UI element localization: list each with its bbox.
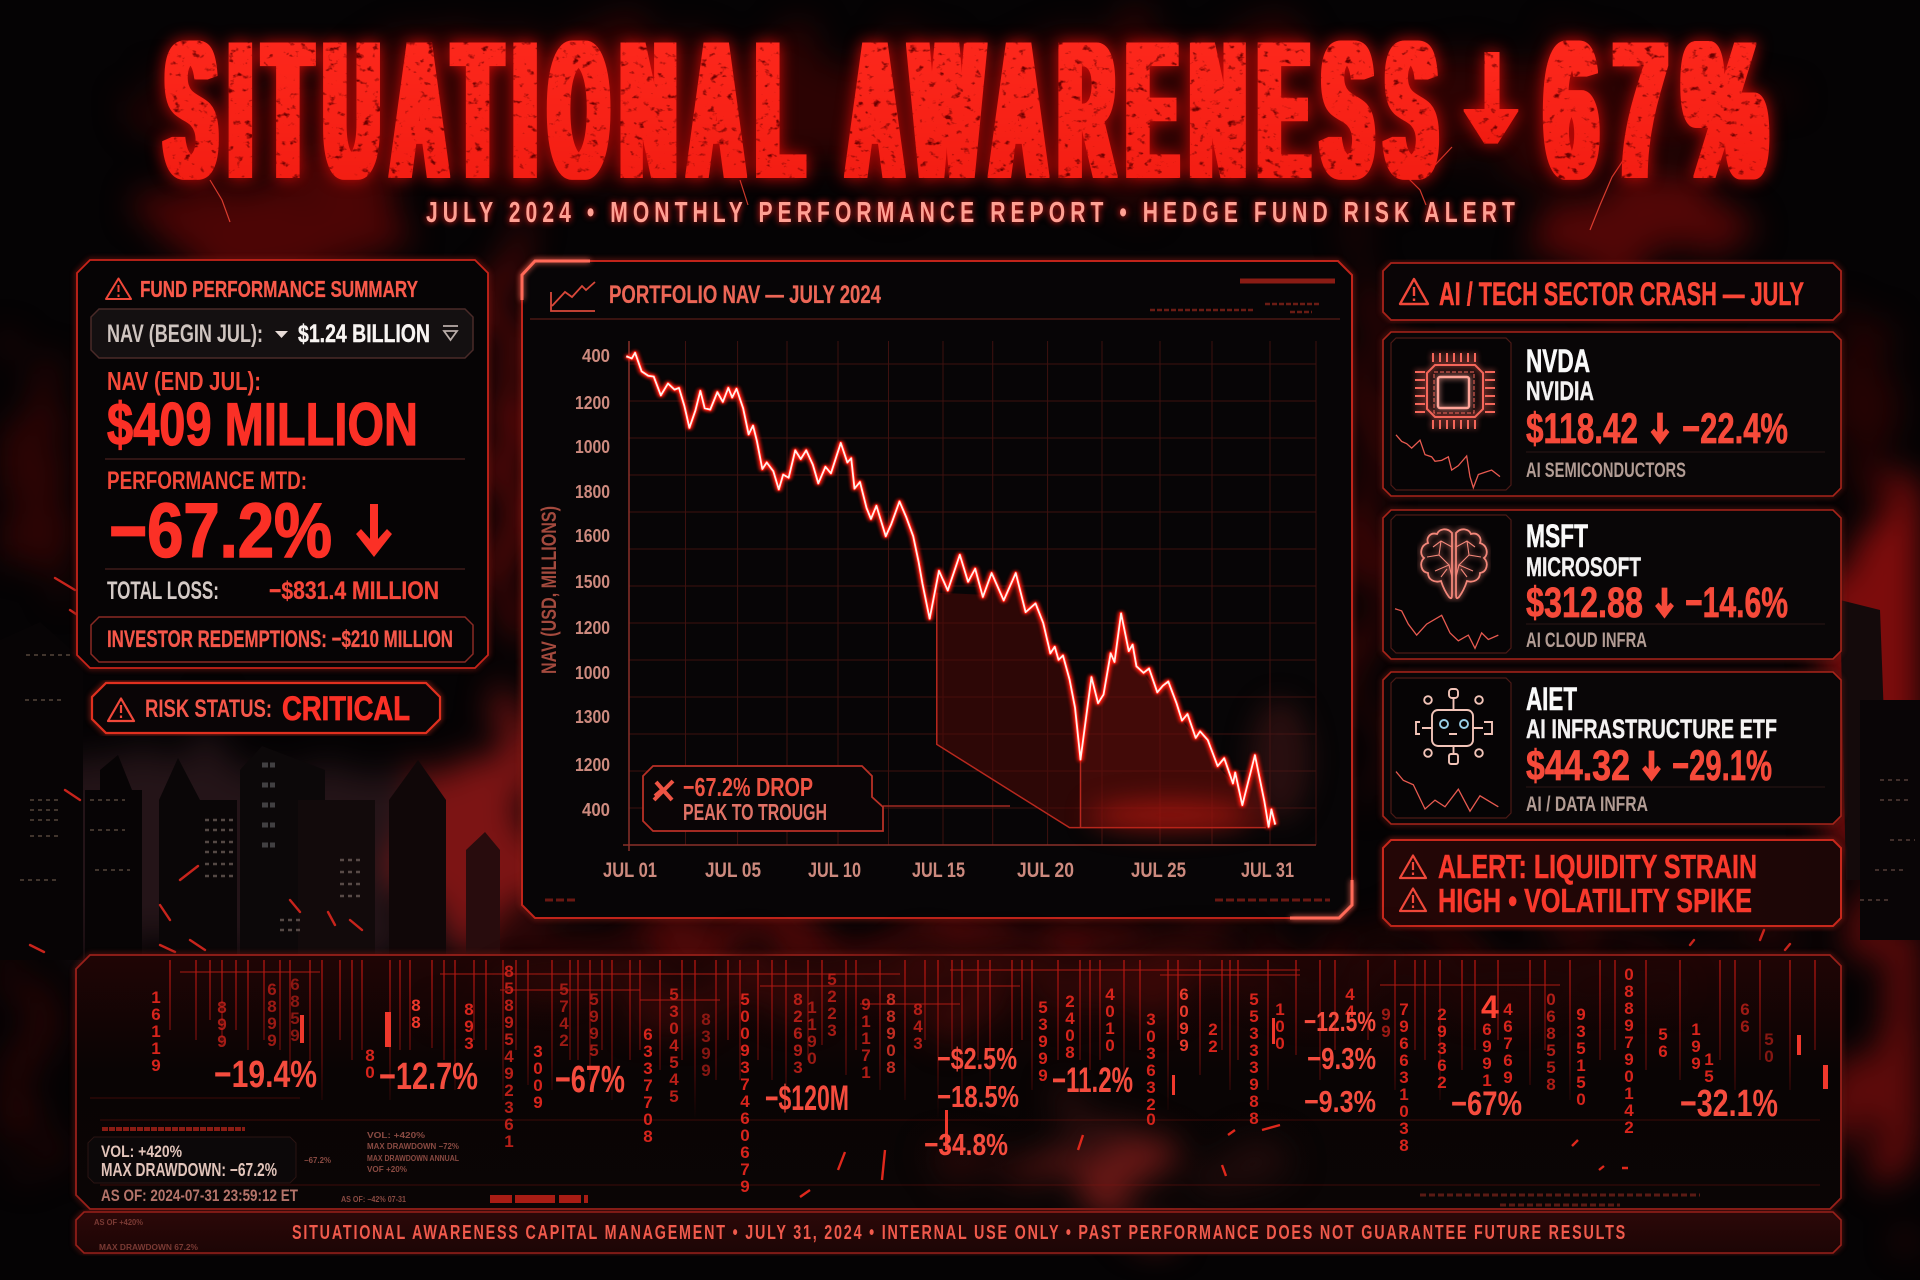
icon: drop cross <box>654 781 673 800</box>
skyline buildings <box>0 600 1920 960</box>
large rain digit: 4 <box>1481 989 1499 1025</box>
floating percentage values: −67% <box>1451 1085 1522 1123</box>
subtitle: JULY 2024 • MONTHLY PERFORMANCE REPORT • HEDGE FUND RISK ALERT <box>426 197 1520 229</box>
data rain digits: 88 <box>406 996 426 1030</box>
data rain digits: 2408 <box>1060 992 1080 1060</box>
data rain digits: 6337708 <box>638 1025 658 1144</box>
building windows <box>20 655 1915 930</box>
data rain digits: 88908 <box>882 990 900 1075</box>
data rain digits: 53999 <box>1034 998 1052 1083</box>
callout: peak to trough: PEAK TO TROUGH <box>683 799 827 825</box>
floating percentage values: −9.3% <box>1304 1084 1376 1119</box>
mini chart <box>1396 435 1500 488</box>
price change: −29.1% <box>1672 742 1772 790</box>
data rain digits: 16119 <box>146 988 166 1073</box>
data rain digits: 796631038 <box>1394 1000 1414 1153</box>
data rain digits: 500937460679 <box>736 990 754 1194</box>
data rain digits: 0 <box>1142 1110 1160 1127</box>
hot glow under line and smoke near chart end <box>1090 700 1310 829</box>
metric: NAV end: $409 MILLION <box>107 391 418 458</box>
mini chart <box>1395 609 1498 648</box>
y axis tick labels: 1500 <box>575 572 610 592</box>
floating percentage values: −32.1% <box>1680 1083 1778 1125</box>
floating percentage values: −$120M <box>765 1079 849 1118</box>
data rain digits: 068558 <box>1542 990 1560 1092</box>
floating percentage values: −12.7% <box>379 1056 478 1098</box>
x axis tick labels: JUL 31 <box>1241 859 1294 882</box>
y axis tick labels: 1200 <box>575 393 610 413</box>
data rain digits: 6859 <box>286 975 304 1043</box>
y axis tick labels: 400 <box>582 346 610 366</box>
panel: data rain band <box>76 955 1841 1209</box>
x axis tick labels: JUL 20 <box>1017 859 1074 882</box>
x axis tick labels <box>603 859 1294 882</box>
small HUD text <box>304 1131 459 1204</box>
metric: NAV end: NAV (END JUL): <box>107 366 261 396</box>
alert line 2: HIGH • VOLATILITY SPIKE <box>1438 882 1752 919</box>
card: NVDA <box>1383 332 1841 496</box>
small HUD text: VOL: +420% <box>367 1131 425 1140</box>
panel: AI tech sector heading <box>1383 263 1841 320</box>
chart axes <box>623 341 1316 851</box>
vertical data streaks <box>170 960 1815 1120</box>
data rain digits: 4010 <box>1100 985 1120 1053</box>
metric: total loss: TOTAL LOSS: <box>107 577 219 605</box>
data rain digits: 85895492361 <box>500 962 518 1149</box>
header HUD detail <box>1150 281 1335 312</box>
price change: $44.32 <box>1526 742 1630 790</box>
data rain digits: 99 <box>1376 1005 1396 1039</box>
ticker: MSFT <box>1526 518 1588 554</box>
small footer HUD: AS OF +420% <box>94 1218 143 1227</box>
metric: total loss <box>107 577 439 605</box>
price change: −14.6% <box>1685 579 1788 627</box>
data rain digits: 8399 <box>696 1010 716 1078</box>
metric: performance MTD: PERFORMANCE MTD: <box>107 467 307 495</box>
alert line 1: ALERT: LIQUIDITY STRAIN <box>1438 848 1757 885</box>
y axis tick labels: 1800 <box>575 482 610 502</box>
bright rain accents <box>300 1012 1828 1150</box>
metric: performance MTD: −67.2% <box>109 488 332 574</box>
HUD readout: VOL: +420% <box>101 1142 182 1161</box>
ticker: AIET <box>1526 681 1577 717</box>
embers <box>30 578 1790 952</box>
card: AIET <box>1383 672 1841 824</box>
data rain digits: 91171 <box>856 995 876 1080</box>
data rain digits: 100 <box>1270 1000 1290 1051</box>
small HUD text: MAX DRAWDOWN ANNUAL <box>367 1154 459 1163</box>
glow and smoke inside band <box>460 967 1680 1199</box>
panel: liquidity alert <box>1383 840 1841 926</box>
embers in band <box>800 1125 1628 1197</box>
icon: chip <box>1415 353 1495 429</box>
drawdown shaded area <box>937 573 1266 828</box>
floating percentage values: −34.8% <box>924 1127 1008 1162</box>
floating percentage values: −12.5% <box>1304 1006 1376 1037</box>
risk value: CRITICAL <box>282 690 410 728</box>
panel heading: FUND PERFORMANCE SUMMARY <box>140 276 418 302</box>
metric: NAV begin: NAV (BEGIN JUL): <box>107 320 263 348</box>
company: MICROSOFT <box>1526 552 1641 582</box>
icon: title down arrow <box>1470 53 1512 143</box>
metric: investor redemptions <box>91 617 473 662</box>
metric: total loss: −$831.4 MILLION <box>269 577 439 605</box>
card: MSFT <box>1383 510 1841 659</box>
floating percentage values <box>214 1006 1778 1162</box>
price change <box>1526 579 1788 627</box>
price change <box>1526 405 1788 453</box>
price change: $312.88 <box>1526 579 1643 627</box>
small footer HUD <box>94 1218 198 1252</box>
callout: peak to trough <box>643 766 1010 831</box>
y axis tick labels: 1000 <box>575 663 610 683</box>
lightning cracks <box>210 137 1648 230</box>
metric: NAV end <box>107 366 418 458</box>
metric: NAV begin: $1.24 BILLION <box>298 320 430 348</box>
chart grid <box>629 341 1316 845</box>
ticker: NVDA <box>1526 343 1590 379</box>
floating percentage values: −19.4% <box>214 1054 317 1096</box>
company: NVIDIA <box>1526 376 1594 406</box>
y axis tick labels: 1600 <box>575 526 610 546</box>
floating percentage values: −9.3% <box>1307 1041 1376 1076</box>
floating percentage values: −18.5% <box>937 1079 1019 1114</box>
data rain digits: 50 <box>1760 1030 1778 1064</box>
data rain digits: 935150 <box>1572 1005 1590 1107</box>
x axis tick labels: JUL 01 <box>603 859 657 882</box>
HUD readout: MAX DRAWDOWN: −67.2% <box>101 1160 277 1180</box>
floating percentage values: −$2.5% <box>937 1041 1017 1076</box>
metric: NAV begin <box>91 309 473 358</box>
x axis tick labels: JUL 25 <box>1131 859 1186 882</box>
data rain digits: 6991 <box>1478 1020 1496 1088</box>
sector tag: AI / DATA INFRA <box>1526 793 1648 816</box>
price change <box>1526 742 1772 790</box>
y axis tick labels: 1200 <box>575 618 610 638</box>
data rain digits: 3009 <box>528 1042 548 1110</box>
chart heading: PORTFOLIO NAV — JULY 2024 <box>609 281 881 309</box>
data rain digits: 0889790142 <box>1620 965 1638 1135</box>
floating percentage values: −67% <box>555 1059 625 1101</box>
y axis tick labels: 1300 <box>575 707 610 727</box>
data rain digits: 5304545 <box>664 985 684 1104</box>
small footer HUD: MAX DRAWDOWN 67.2% <box>99 1243 198 1252</box>
data rain digits: 55333988 <box>1244 990 1264 1126</box>
corner detail <box>545 898 1330 902</box>
sector tag: AI CLOUD INFRA <box>1526 629 1647 652</box>
icon: robot <box>1416 689 1492 764</box>
icon: warning <box>1400 856 1426 878</box>
icon: warning <box>1400 279 1428 304</box>
y axis tick labels <box>575 346 610 820</box>
price change: −22.4% <box>1682 405 1788 453</box>
icon: chart trend <box>551 282 595 311</box>
data rain digits: 5995 <box>584 990 604 1058</box>
data rain digits: 29362 <box>1432 1005 1452 1090</box>
mini chart <box>1396 772 1498 811</box>
floating percentage values: −11.2% <box>1052 1061 1133 1100</box>
y axis tick labels: 1000 <box>575 437 610 457</box>
data rain digits: 80 <box>360 1046 380 1080</box>
data rain digits: 6899 <box>262 980 282 1048</box>
data rain digits: 15 <box>1700 1050 1718 1084</box>
panel: portfolio NAV chart <box>522 261 1352 918</box>
data rain digits: 44 <box>1340 985 1360 1019</box>
callout: peak to trough: −67.2% DROP <box>683 772 813 802</box>
HUD readout <box>88 1129 298 1205</box>
data rain digits: 56 <box>1654 1025 1672 1059</box>
NAV price line <box>626 353 1275 827</box>
small HUD text: VOF +20% <box>367 1165 407 1174</box>
panel: fund performance summary <box>77 260 488 668</box>
small HUD text: −67.2% <box>304 1156 331 1165</box>
panel: footer disclaimer <box>76 1212 1841 1253</box>
data rain digits: 1190 <box>802 998 822 1066</box>
data rain digits: 893 <box>460 1000 478 1051</box>
data rain digits: 5223 <box>822 970 842 1038</box>
data rain digits: 5742 <box>554 980 574 1048</box>
x axis tick labels: JUL 05 <box>705 859 761 882</box>
data rain digits: 843 <box>908 1000 928 1051</box>
y axis tick labels: 1200 <box>575 755 610 775</box>
small HUD text: MAX DRAWDOWN −72% <box>367 1142 459 1151</box>
icon: down arrow <box>356 504 392 557</box>
data rain digits <box>146 962 1778 1194</box>
price change: $118.42 <box>1526 405 1638 453</box>
metric: investor redemptions: INVESTOR REDEMPTIONS: −$210 MILLION <box>107 626 453 653</box>
data rain digits: 46769 <box>1498 1000 1518 1085</box>
data rain digits: 6099 <box>1174 985 1194 1053</box>
x axis tick labels: JUL 10 <box>808 859 861 882</box>
sector tag: AI SEMICONDUCTORS <box>1526 459 1686 482</box>
icon: brain <box>1421 529 1487 598</box>
data rain digits: 899 <box>212 998 232 1049</box>
risk label: RISK STATUS: <box>145 695 272 723</box>
data rain digits: 303632 <box>1142 1010 1160 1112</box>
icon: warning <box>1400 888 1426 911</box>
data rain digits: 199 <box>1686 1020 1706 1071</box>
company: AI INFRASTRUCTURE ETF <box>1526 714 1777 744</box>
icon: warning <box>106 278 131 299</box>
axis label: NAV: NAV (USD, MILLIONS) <box>538 506 561 674</box>
icon: warning <box>108 698 134 721</box>
HUD readout: AS OF: 2024-07-31 23:59:12 ET <box>101 1186 298 1205</box>
data rain digits: 66 <box>1736 1000 1754 1034</box>
y axis tick labels: 400 <box>582 800 610 820</box>
panel: risk status <box>92 683 440 733</box>
data rain digits: 82693 <box>788 990 808 1075</box>
x axis tick labels: JUL 15 <box>912 859 965 882</box>
small HUD text: AS OF: −42% 07-31 <box>341 1195 406 1204</box>
data rain digits: 22 <box>1204 1020 1222 1054</box>
